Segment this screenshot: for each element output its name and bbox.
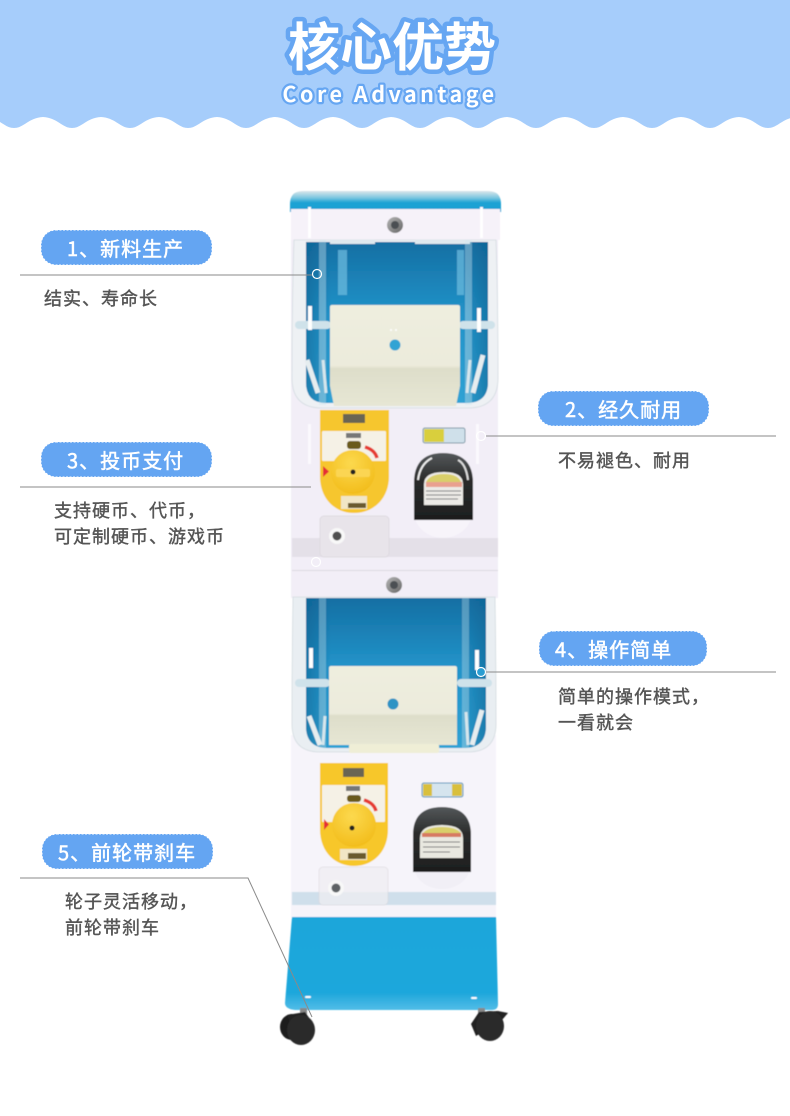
pill 1 <box>41 230 212 265</box>
lower body <box>291 735 496 918</box>
lower capsule outlet <box>413 807 471 889</box>
upper body <box>291 240 498 598</box>
lower lock <box>386 577 402 593</box>
pill 1: 1、新料生产 <box>67 233 184 262</box>
lower key plate <box>319 867 388 905</box>
body 5: 前轮带刹车 <box>65 914 160 940</box>
callout 2: durable <box>476 391 776 473</box>
upper capsule outlet <box>414 453 473 538</box>
pill 5: 5、前轮带刹车 <box>58 837 196 866</box>
body 4: 简单的操作模式， <box>558 683 710 709</box>
lower cream panel <box>329 666 457 753</box>
callout 5: front-wheel brake <box>20 834 312 1017</box>
pill 3 <box>41 442 212 477</box>
blue base <box>285 917 498 1010</box>
pill 2: 2、经久耐用 <box>565 394 682 423</box>
lower yellow coin unit <box>320 763 388 866</box>
body 1: 结实、寿命长 <box>44 285 158 311</box>
header banner with wavy edge <box>0 0 790 128</box>
callout 1: new material <box>20 230 322 311</box>
callout 4: simple operation <box>476 631 776 735</box>
left caster <box>280 1008 315 1045</box>
upper cream panel <box>330 305 460 406</box>
lower capsule window <box>292 597 496 753</box>
pill 3: 3、投币支付 <box>67 445 184 474</box>
upper coin window <box>423 428 465 443</box>
pill 5 <box>42 834 213 869</box>
body 5: 轮子灵活移动， <box>65 888 198 914</box>
top lock <box>387 217 403 233</box>
upper capsule window <box>292 240 498 408</box>
subtitle: Core Advantage <box>282 78 498 109</box>
top cap <box>290 191 501 240</box>
body 4: 一看就会 <box>558 709 634 735</box>
pill 4: 4、操作简单 <box>555 634 672 663</box>
body 3: 可定制硬币、游戏币 <box>54 523 225 549</box>
gashapon machine <box>280 191 508 1045</box>
upper yellow coin unit <box>320 410 389 513</box>
pill 2 <box>538 391 709 426</box>
callout 3: coin payment <box>20 442 320 566</box>
body 3: 支持硬币、代币， <box>54 497 206 523</box>
body 2: 不易褪色、耐用 <box>558 447 691 473</box>
pill 4 <box>539 631 707 666</box>
right caster <box>471 1008 508 1041</box>
title: 核心优势 <box>288 6 496 81</box>
lower coin window <box>422 783 463 797</box>
upper key plate <box>320 516 389 557</box>
